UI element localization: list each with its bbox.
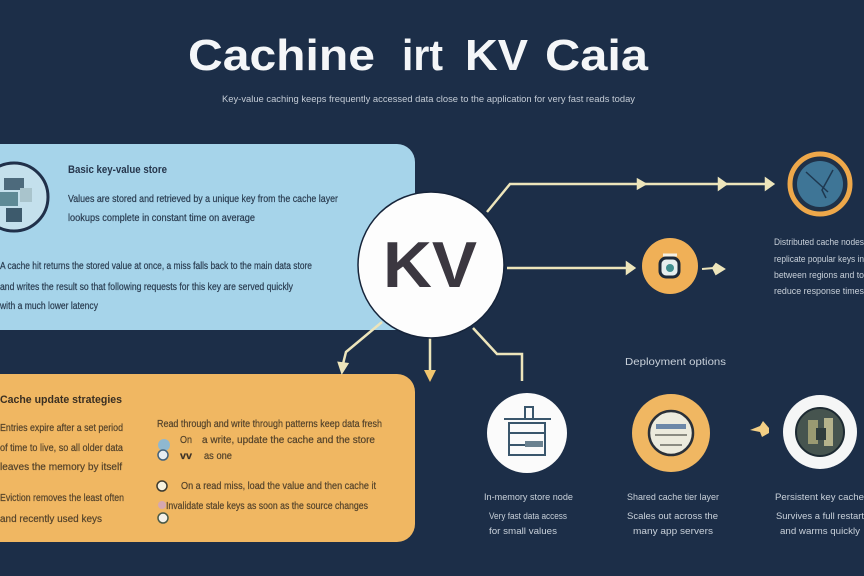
text block: orange left column: and recently used keys bbox=[0, 514, 102, 525]
panel: orange strategies bbox=[0, 374, 415, 542]
text block: orange storage node caption bbox=[627, 492, 719, 537]
text block: white server node caption bbox=[484, 492, 573, 537]
arrow: orange icon to right bbox=[702, 264, 724, 274]
text block: orange right item two: On a read miss, load the value and then cache it bbox=[181, 481, 376, 492]
text block: orange right item one: a write, update the cache and the store bbox=[202, 435, 375, 446]
icon: small pink and white badge bbox=[158, 501, 168, 523]
text block: blue panel intro: lookups complete in constant time on average bbox=[68, 213, 255, 224]
text block: blue panel body: A cache hit returns the stored value at once, a miss falls back to the main data store bbox=[0, 261, 312, 272]
title: KV bbox=[465, 31, 529, 80]
text block: blue panel body: and writes the result so that following requests for this key are served quickly bbox=[0, 282, 293, 293]
text block: orange right item two bbox=[166, 481, 376, 512]
title: Cachine bbox=[188, 31, 375, 80]
text block: orange left column: leaves the memory by itself bbox=[0, 462, 122, 473]
text block: orange left column: of time to live, so all older data bbox=[0, 443, 123, 454]
text block: orange left column bbox=[0, 423, 124, 525]
text block: white server node caption: Very fast data access bbox=[489, 511, 567, 522]
text block: blue panel intro: Values are stored and retrieved by a unique key from the cache layer bbox=[68, 194, 339, 205]
text block: orange right item two: Invalidate stale keys as soon as the source changes bbox=[166, 501, 368, 512]
text block: white archive node caption: Persistent key cache bbox=[775, 492, 864, 503]
text block: orange right item one: as one bbox=[204, 451, 232, 462]
icon: small crescent bbox=[157, 481, 167, 491]
arrow: central to lower left bbox=[339, 322, 382, 372]
text block: white archive node caption: and warms quickly bbox=[780, 526, 860, 537]
text block: white archive node caption bbox=[775, 492, 864, 537]
text block: blue panel intro bbox=[68, 194, 339, 224]
icon: white server node bbox=[487, 393, 567, 473]
panel: blue overview bbox=[0, 144, 415, 330]
text block: orange right item one bbox=[180, 435, 375, 462]
text block: orange storage node caption: many app servers bbox=[633, 526, 713, 537]
arrow: small star connector bbox=[750, 421, 769, 437]
subtitle: Key-value caching keeps frequently accessed data close to the application for very fast reads today bbox=[222, 94, 635, 105]
icon: orange storage node bbox=[632, 394, 710, 472]
icon: top right blue disc bbox=[790, 154, 850, 214]
title: Caia bbox=[545, 31, 649, 80]
heading: orange panel: Cache update strategies bbox=[0, 394, 122, 406]
central KV label: KV bbox=[383, 228, 477, 301]
text block: orange left column: Eviction removes the least often bbox=[0, 493, 124, 504]
text block: top right description bbox=[774, 237, 864, 297]
text block: blue panel body: with a much lower latency bbox=[0, 301, 98, 312]
text block: orange left column: Entries expire after a set period bbox=[0, 423, 123, 434]
icon: blocks badge bbox=[0, 163, 48, 231]
icon: white archive node bbox=[783, 395, 857, 469]
text block: orange right item one: vv bbox=[180, 451, 192, 462]
arrow: central to top right bbox=[487, 179, 773, 212]
text block: orange storage node caption: Scales out across the bbox=[627, 511, 718, 522]
title: irt bbox=[402, 31, 443, 80]
text block: orange right item one: On bbox=[180, 435, 192, 446]
text block: white server node caption: In-memory store node bbox=[484, 492, 573, 503]
text block: white server node caption: for small values bbox=[489, 526, 557, 537]
arrow: central to bottom node bbox=[473, 328, 522, 381]
text block: orange right intro: Read through and write through patterns keep data fresh bbox=[157, 419, 382, 430]
arrow: central downward bbox=[424, 338, 436, 382]
text block: white archive node caption: Survives a full restart bbox=[776, 511, 864, 522]
text block: orange storage node caption: Shared cache tier layer bbox=[627, 492, 719, 503]
arrow: central to orange icon bbox=[507, 263, 634, 273]
icon: orange lock node bbox=[642, 238, 698, 294]
heading: blue panel: Basic key-value store bbox=[68, 164, 167, 176]
text block: blue panel body bbox=[0, 261, 312, 312]
heading: bottom row: Deployment options bbox=[625, 357, 726, 368]
icon: blue globe bbox=[158, 439, 170, 460]
central KV node bbox=[358, 192, 504, 338]
